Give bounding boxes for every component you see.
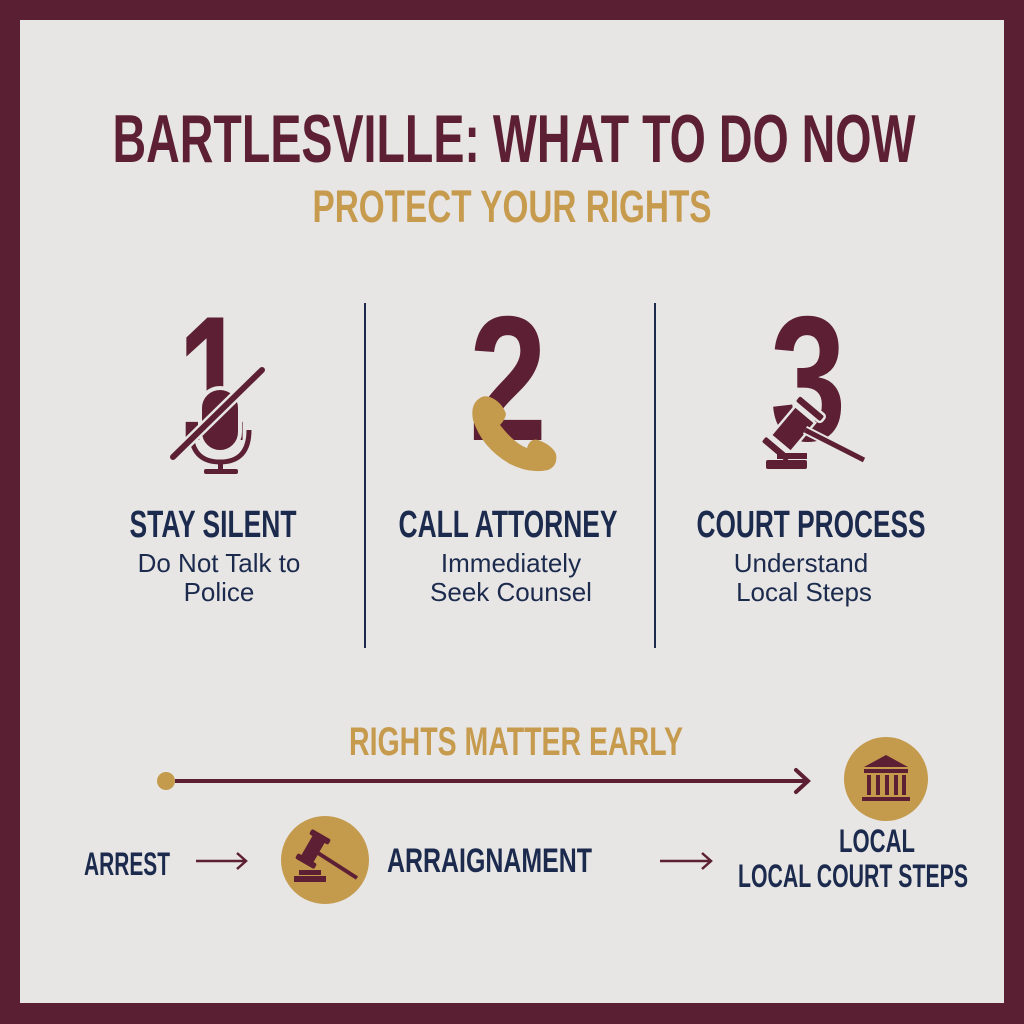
panel: call attorney: [398, 279, 618, 607]
step: arraignment: ARRAIGNAMENT: [387, 842, 592, 880]
panel: call attorney: Seek Counsel: [430, 577, 592, 607]
timeline arrow: [157, 770, 808, 792]
subtitle: PROTECT YOUR RIGHTS: [312, 181, 712, 232]
panel: stay silent: [130, 279, 300, 607]
icon: courthouse: [844, 737, 928, 821]
panel: court process: Local Steps: [736, 577, 872, 607]
panel: court process: [696, 279, 926, 607]
heading: STAY SILENT: [130, 504, 296, 546]
icon: gavel circle: [281, 816, 369, 904]
panel: stay silent: Police: [184, 577, 254, 607]
number 2: 2: [469, 279, 547, 478]
arrow: [196, 853, 246, 869]
icon: muted microphone: [173, 370, 262, 474]
heading: CALL ATTORNEY: [398, 504, 618, 546]
timeline heading: RIGHTS MATTER EARLY: [349, 720, 683, 764]
step: local court steps: LOCAL: [839, 823, 915, 859]
icon: gavel: [760, 394, 864, 469]
number 3: 3: [770, 279, 846, 478]
description: Do Not Talk to: [138, 548, 300, 578]
description: Immediately: [441, 548, 581, 578]
icon: phone: [472, 396, 556, 471]
step: local court steps: [738, 823, 968, 894]
description: Understand: [734, 548, 868, 578]
arrow: [660, 853, 711, 869]
heading: COURT PROCESS: [696, 504, 926, 546]
step: arrest: ARREST: [84, 846, 170, 882]
number 1: 1: [178, 279, 246, 478]
